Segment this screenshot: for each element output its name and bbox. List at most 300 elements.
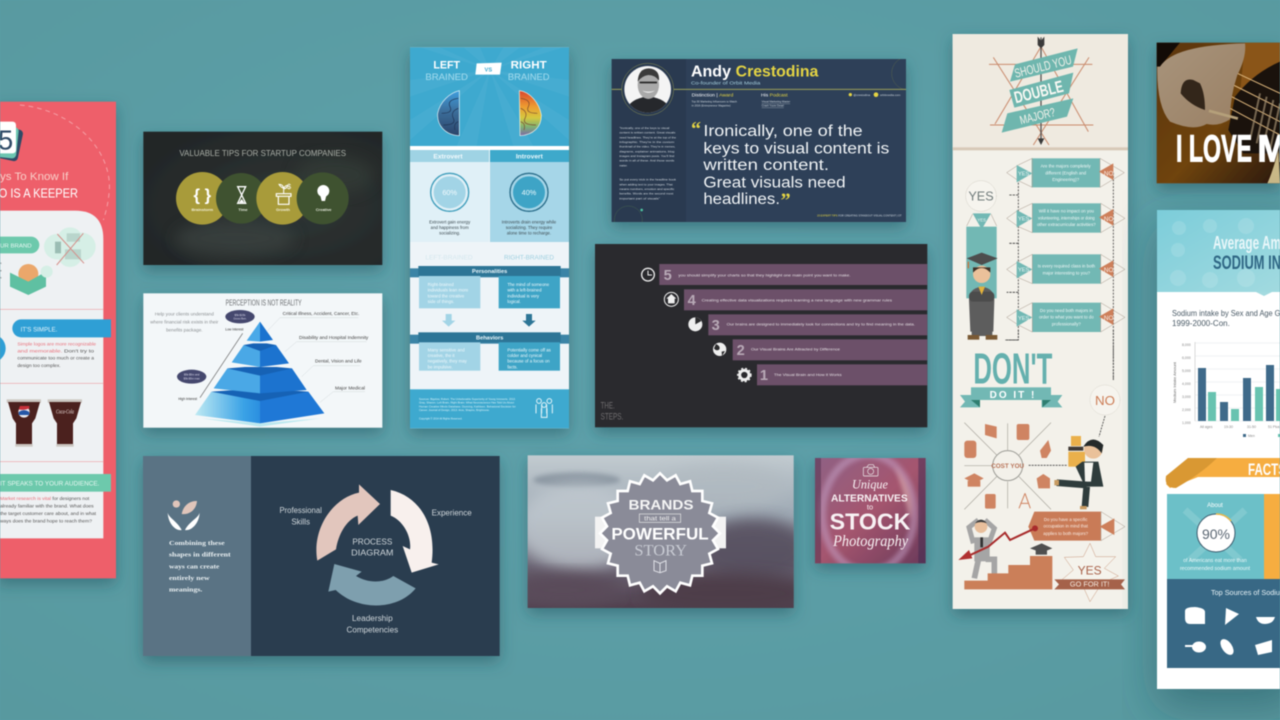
column: introvert: 40% (522, 188, 537, 197)
panel: valuable tips for startup companies (143, 132, 382, 265)
circle: creative: Creative (316, 207, 332, 212)
sidebar text: diagrams, explainer animations, blog (619, 149, 675, 153)
quote: Great visuals need (703, 174, 846, 191)
question 2: other extracurricular activities? (1037, 222, 1096, 227)
text: combining these shapes (169, 540, 232, 594)
badge text: POWERFUL (611, 524, 709, 543)
pyramid labels: Major Medical (335, 385, 365, 390)
column: introvert (490, 150, 569, 242)
cost diagram: COST YOU (991, 463, 1025, 470)
header band (410, 47, 569, 146)
oval label: high interest: $5k-$5m max (184, 377, 200, 381)
subheadings (425, 254, 554, 261)
box: left personalities: toward the creative (428, 293, 465, 298)
box: right personalities: logical. (507, 299, 521, 304)
text: market research: already familiar with the brand. What does (0, 504, 94, 509)
bar chart: 5,000 (1182, 369, 1191, 373)
circle: no: NO (1095, 393, 1115, 408)
label: professional skills: Professional (279, 506, 322, 515)
quote: ” (781, 190, 791, 212)
label: it's simple: IT'S SIMPLE. (21, 327, 58, 333)
distinction: in 2016 (Entrepreneur Magazine) (692, 104, 731, 108)
bar chart: 51 Plus (1268, 425, 1280, 429)
text: market research (0, 496, 97, 523)
oval label: low interest (225, 310, 255, 331)
strings (1230, 73, 1280, 135)
sidebar text: content is written content. Great visuals (619, 131, 676, 135)
box: right behaviors: Potentially come off as (507, 347, 551, 352)
box: left behaviors: creative, the it (428, 353, 455, 358)
oval label: high interest (177, 370, 206, 401)
figure: stressed man and red arrow (958, 520, 1038, 578)
footer: Human Creative Minds Database. Dunning, Kathleen. Behavioral Decision for (419, 405, 516, 408)
label: your brand: UR BRAND (0, 243, 32, 249)
pyramid labels: Disability and Hospital Indemnity (299, 335, 369, 340)
label: professional skills (279, 506, 322, 526)
stat: 90 percent: 90% (1202, 526, 1230, 542)
arrow: right (522, 314, 536, 327)
bottom rim (1267, 150, 1280, 183)
column: extrovert (410, 150, 489, 242)
box: left behaviors: Many sensitive and (428, 347, 465, 352)
text: combining these shapes: ways can create (169, 563, 219, 570)
bar chart: 8,000 (1182, 343, 1191, 347)
sidebar text: thumbnail of the video. They're in memes, (619, 145, 676, 149)
bar chart: 19-30 (1224, 425, 1233, 429)
panel: should you double major, bottom (958, 330, 1125, 602)
step 3 (688, 314, 927, 335)
badge text (611, 496, 709, 559)
badge: number 5 (0, 122, 24, 162)
lens highlights (815, 455, 926, 572)
ribbon: should you: SHOULD YOU (1013, 53, 1073, 81)
social: @crestodina (853, 93, 870, 97)
orange stat box (1264, 494, 1280, 579)
title text: to (867, 502, 873, 511)
distinction (692, 93, 737, 108)
facts ribbon (1166, 458, 1280, 488)
box: left behaviors (419, 342, 480, 371)
decorative arcs (891, 60, 902, 88)
column: introvert: alone time to recharge. (507, 231, 551, 236)
oval label: low interest: Low Interest (225, 327, 243, 331)
box: right behaviors: colder and cynical (507, 353, 542, 358)
icon: book (654, 561, 666, 573)
panel: sodium intake (1157, 210, 1280, 689)
circle: brainstorm: Brainstorm (191, 207, 214, 212)
sound hole (1228, 62, 1280, 153)
column: extrovert: Extrovert (433, 154, 463, 161)
label: your brand (0, 237, 39, 253)
text: combining these shapes: meanings. (169, 587, 203, 594)
chart title (1172, 309, 1280, 328)
step 5: 5 (664, 268, 672, 284)
title: VALUABLE TIPS FOR STARTUP COMPANIES (179, 148, 346, 158)
step 2 (713, 339, 927, 360)
hand (1157, 43, 1245, 127)
guitar top (1240, 42, 1280, 88)
sidebar text: infographic. They're in the custom (619, 140, 675, 144)
heading: left brained: BRAINED (425, 72, 468, 82)
text: combining these shapes: entirely new (169, 575, 210, 582)
sidebar text: matter. (619, 163, 628, 167)
step 2: Our Visual Brains Are Attracted by Difference (751, 348, 840, 352)
circle: brainstorm: { } (194, 186, 212, 205)
quote: keys to visual content is (703, 140, 890, 157)
text: simple logos: communicate too much or create a (17, 356, 95, 361)
ribbon: double: DOUBLE (1012, 77, 1065, 107)
circle: time (216, 173, 267, 224)
icons: bread, pizza, soup (1185, 607, 1275, 625)
question 1: different (English and (1045, 170, 1087, 175)
box: left personalities: individuals lean more (428, 288, 469, 293)
portrait (622, 63, 674, 115)
ribbon: should you (1010, 48, 1078, 82)
starburst: yes go for it: GO FOR IT! (1070, 579, 1109, 588)
bar chart: Medium Intake Amount (1172, 361, 1177, 403)
box: occupation question: occupation in mind that (1043, 524, 1089, 529)
banner: behaviors (410, 332, 569, 344)
paper header (953, 34, 1128, 150)
step 4: Creating effective data visualizations requires learning a new language with new grammar rules (702, 299, 892, 303)
stat: 90 percent: About (1207, 503, 1223, 509)
icons: chicken, salami, cheese (1185, 637, 1272, 657)
name: Crestodina (736, 64, 819, 81)
footer (410, 389, 569, 428)
footer: Career. Journal of Design, 2013. Aros, Shapiro, Brightness. (419, 409, 490, 412)
panel: should you double major, top (953, 34, 1128, 609)
white content card (0, 211, 103, 538)
footer: Sources: Bigelow, Robert. The Unbelievable Superiority of Young Introverts. 2013. (419, 398, 516, 401)
name (691, 64, 819, 81)
question 3: YES (1018, 268, 1030, 274)
box: right personalities: The mind of someone (507, 282, 550, 287)
sidebar text: So put every trick in the headline book (619, 178, 677, 182)
icon: coca-cola cup: Coca-Cola (56, 408, 74, 415)
name: Andy (691, 64, 731, 81)
step 3: 3 (712, 318, 720, 334)
oval label: high interest: $5k-$5m and (184, 373, 200, 377)
stat: 90 percent (1167, 494, 1264, 579)
banner: behaviors: Behaviors (476, 335, 503, 341)
cost diagram (964, 423, 1051, 509)
text: market research: Market research is vital for designers not (0, 496, 90, 501)
oval label: low interest: Gross Ben. (233, 317, 247, 321)
label: it's simple (12, 319, 111, 337)
panel: i love my guitar (1157, 43, 1280, 183)
text fragment: e (0, 268, 2, 272)
podcast (761, 93, 790, 108)
panel: andy crestodina quote (612, 57, 925, 234)
question 1 (1007, 158, 1124, 187)
question 4 (1007, 303, 1125, 332)
stat: 90 percent: of Americans eat more than (1183, 558, 1247, 564)
subtitle: Co-founder of Orbit Media (691, 81, 761, 87)
text: simple logos: and memorable. Don't try to (17, 349, 95, 354)
podcast: Visual Marketing Master (762, 100, 790, 104)
text: market research: the target customer care about, and in what (0, 511, 97, 516)
starburst: yes go for it (1054, 543, 1125, 602)
heading: ys To Know If (0, 171, 69, 183)
label: it speaks to your audience: IT SPEAKS TO YOUR AUDIENCE. (0, 482, 100, 488)
question 1: NO (1104, 170, 1113, 177)
box: occupation question: Do you have a specific (1044, 517, 1088, 522)
question 3: Is every required class in both (1038, 263, 1096, 268)
circle: time: Time (238, 207, 248, 212)
column: introvert: Introverts drain energy while (502, 219, 557, 224)
panel: 5 ways to know your logo is a keeper (0, 102, 116, 578)
bar chart: 6,000 (1182, 356, 1191, 360)
badge text: that tell a (644, 516, 676, 523)
heading: right brained: BRAINED (508, 72, 550, 82)
column: extrovert: socializing. (439, 231, 460, 236)
question 2: volunteering, internships or doing (1038, 215, 1095, 220)
label: the steps: THE. (601, 400, 615, 410)
badge text: STORY (634, 542, 687, 559)
panel: perception is not reality (143, 293, 382, 428)
label: leadership competencies: Competencies (346, 625, 398, 634)
question 4: professionally? (1052, 321, 1081, 326)
pyramid labels (267, 311, 369, 402)
quote (691, 118, 890, 212)
heading: O IS A KEEPER (0, 185, 78, 200)
sidebar text: images and Instagram posts. You'll find (619, 154, 675, 158)
oval label: high interest: High Interest (178, 397, 197, 401)
text: help your clients (150, 312, 219, 333)
ribbon: do it: DO IT ! (990, 390, 1036, 401)
question 1: Are the majors completely (1041, 164, 1092, 169)
badge: vs: VS (485, 67, 492, 73)
star lines (989, 47, 1093, 145)
stat: 90 percent: recommended sodium amount (1180, 566, 1251, 572)
title text: STOCK (830, 508, 911, 534)
ribbon: major: MAJOR? (1018, 105, 1057, 127)
social: orbitmedia.com (880, 93, 901, 97)
sidebar (612, 60, 644, 221)
circle: growth (256, 172, 309, 225)
arrow (1038, 37, 1044, 145)
box: occupation question: applies to both majors? (1043, 531, 1089, 536)
circle: growth: $ (287, 182, 291, 191)
banner: personalities: Personalities (472, 269, 507, 275)
box: left behaviors: be impulsive. (428, 364, 453, 369)
column: extrovert: and happiness from (431, 225, 469, 230)
title text (830, 477, 911, 550)
box: left behaviors: negatively, they may (428, 359, 468, 364)
label: leadership competencies (346, 614, 398, 634)
center label (351, 537, 393, 558)
ribbon: major (1002, 98, 1073, 133)
banner with graduate: YES (977, 218, 986, 223)
icon: hands with leaves (168, 500, 200, 530)
question 2: YES (1018, 217, 1030, 223)
box: left personalities: Right-brained (428, 282, 454, 287)
arrow: experience (391, 490, 439, 573)
icon: left brain (438, 91, 459, 136)
step 2: 2 (737, 343, 745, 359)
panel: the steps (595, 244, 927, 427)
badge: vs (475, 63, 502, 75)
heading: right brained: RIGHT (511, 60, 547, 72)
heading: left brained (425, 60, 468, 82)
forest texture (507, 463, 813, 613)
header (1157, 210, 1280, 296)
question 2: NO (1104, 216, 1113, 223)
column: introvert: Introvert (516, 154, 544, 161)
center label: DIAGRAM (351, 548, 393, 558)
sidebar text: "Ironically, one of the keys to visual (619, 126, 670, 130)
pyramid chart (195, 322, 324, 427)
sidebar text: words in all of these. And those words (619, 159, 675, 163)
text fragment: s (0, 275, 2, 279)
sidebar (143, 456, 251, 656)
center label: PROCESS (352, 537, 393, 547)
icon: pepsi cup (7, 399, 41, 447)
circle: yes: YES (968, 190, 994, 204)
text: help your clients: benefits package. (166, 328, 203, 333)
text fragment (0, 261, 2, 279)
box: left personalities (419, 276, 480, 308)
ribbon: do it (960, 387, 1062, 407)
podcast: His Podcast (761, 93, 789, 98)
circle: brainstorm (176, 172, 229, 225)
sidebar text: means numbers, emotion and specific (619, 187, 675, 191)
quote: headlines. (703, 191, 780, 208)
text: simple logos: Simple logos are more recognizable (17, 341, 97, 346)
box: right personalities: individual is very (507, 293, 540, 298)
title text: Unique (852, 477, 888, 491)
pyramid labels: Critical Illness, Accident, Cancer, Etc. (283, 311, 359, 316)
box: right behaviors: facts. (507, 364, 518, 369)
box: right behaviors (499, 342, 560, 371)
heading: don't: DON'T (973, 344, 1052, 393)
dashed flow lines (1018, 173, 1113, 380)
step 5 (642, 264, 927, 285)
question 2 (1007, 203, 1125, 233)
bar chart: 4,000 (1182, 382, 1191, 386)
question 4: order to what you want to do (1039, 315, 1094, 320)
question 3 (1007, 254, 1125, 284)
question 1: Engineering)? (1052, 177, 1080, 182)
chart title: 1999-2000-Con. (1172, 319, 1230, 328)
column: extrovert: Extrovert gain energy (429, 219, 471, 224)
figure: running man with books (1054, 436, 1103, 509)
panel: left vs right brained (410, 47, 569, 428)
box: right behaviors: because of a focus on (507, 359, 550, 364)
top sources of sodium (1167, 579, 1280, 668)
distinction: Distinction | Award (692, 93, 734, 98)
bar chart (1172, 342, 1280, 438)
column: introvert: socializing. They require (506, 225, 553, 230)
step 1 (738, 364, 927, 385)
question 4: YES (1018, 316, 1030, 322)
icon: thought cloud (44, 227, 96, 267)
banner with graduate (966, 213, 998, 332)
heading (0, 171, 78, 200)
badge text: BRANDS (628, 496, 693, 512)
subheadings: LEFT-BRAINED (425, 254, 473, 261)
text fragment: s (0, 261, 2, 265)
label: the steps (601, 400, 623, 421)
bar chart: 3,000 (1182, 395, 1191, 399)
step 4 (664, 289, 927, 310)
bar chart: 31-50 (1247, 425, 1256, 429)
question 3: NO (1104, 267, 1113, 274)
dashed arrow (1005, 330, 1113, 465)
step 3: Our brains are designed to immediately look for connections and try to find meaning in the data. (727, 322, 915, 326)
texture band (953, 147, 1128, 150)
quote: written content. (702, 157, 829, 174)
pyramid labels: Dental, Vision and Life (315, 359, 362, 364)
title text: Photography (832, 533, 909, 550)
quote: “ (691, 118, 701, 140)
sidebar text: important part of visuals" (619, 196, 660, 200)
bar chart: 2,000 (1182, 408, 1191, 412)
icon: person reading (10, 264, 53, 295)
heading: left brained: LEFT (433, 60, 460, 72)
icon: blue circle (0, 334, 6, 362)
sidebar text: when adding text to your images. That (619, 182, 673, 186)
bar chart: 1,000 (1182, 421, 1191, 425)
title text: ALTERNATIVES (831, 493, 908, 504)
arrows to graduate (1007, 195, 1018, 340)
circle: creative (297, 172, 349, 224)
panel: brands that tell a powerful story (507, 455, 813, 613)
text: market research: ways does the brand hope to reach them? (0, 518, 93, 523)
box: right personalities: with a left-brained (507, 288, 542, 293)
arrow: leadership competencies (328, 564, 416, 605)
social (849, 92, 901, 97)
step 1: The Visual Brain and How it Works (774, 373, 842, 377)
icon: coca-cola cup (48, 399, 82, 447)
banner: personalities (410, 266, 569, 277)
footer credit: 15 EXPERT TIPS FOR CREATING STANDOUT VISUAL CONTENT | OT (817, 215, 902, 218)
text: combining these shapes: Combining these (169, 540, 225, 547)
circle: yes (966, 181, 996, 211)
quote: Ironically, one of the (703, 123, 863, 140)
panel: unique alternatives to stock photography (815, 455, 926, 572)
circle: growth: Growth (276, 207, 291, 212)
graduate legs (968, 330, 997, 340)
sidebar text: need headlines. They're at the top of the (619, 135, 677, 139)
icon: camera (863, 465, 878, 476)
step 4: 4 (688, 293, 697, 309)
circle: no (1090, 385, 1120, 415)
box: occupation question (1028, 512, 1125, 541)
arrow: professional skills (316, 484, 380, 561)
sidebar text (619, 126, 677, 200)
panel: process diagram (143, 456, 500, 656)
fret bars (1250, 93, 1280, 150)
question 1: YES (1018, 171, 1030, 177)
question 4: Do you need both majors in (1040, 308, 1093, 313)
distinction: Top 30 Marketing Influencers to Watch (692, 100, 737, 104)
subheadings: RIGHT-BRAINED (504, 254, 554, 261)
text: help your clients: where financial risk exists in their (150, 319, 219, 324)
podcast: Crash Youre Detail (762, 104, 784, 108)
column: extrovert: 60% (442, 188, 457, 197)
sidebar text: benefits. Words are the second most (619, 192, 674, 196)
oval label: low interest: $5k-$15k (235, 313, 246, 317)
question 4: NO (1104, 315, 1113, 322)
dark corner (1157, 43, 1180, 67)
starburst: yes go for it: YES (1078, 563, 1102, 577)
text: simple logos (17, 341, 97, 368)
title: PERCEPTION IS NOT REALITY (226, 298, 302, 308)
label: leadership competencies: Leadership (352, 614, 393, 623)
label: experience: Experience (432, 508, 472, 517)
heading: right brained (508, 60, 550, 82)
